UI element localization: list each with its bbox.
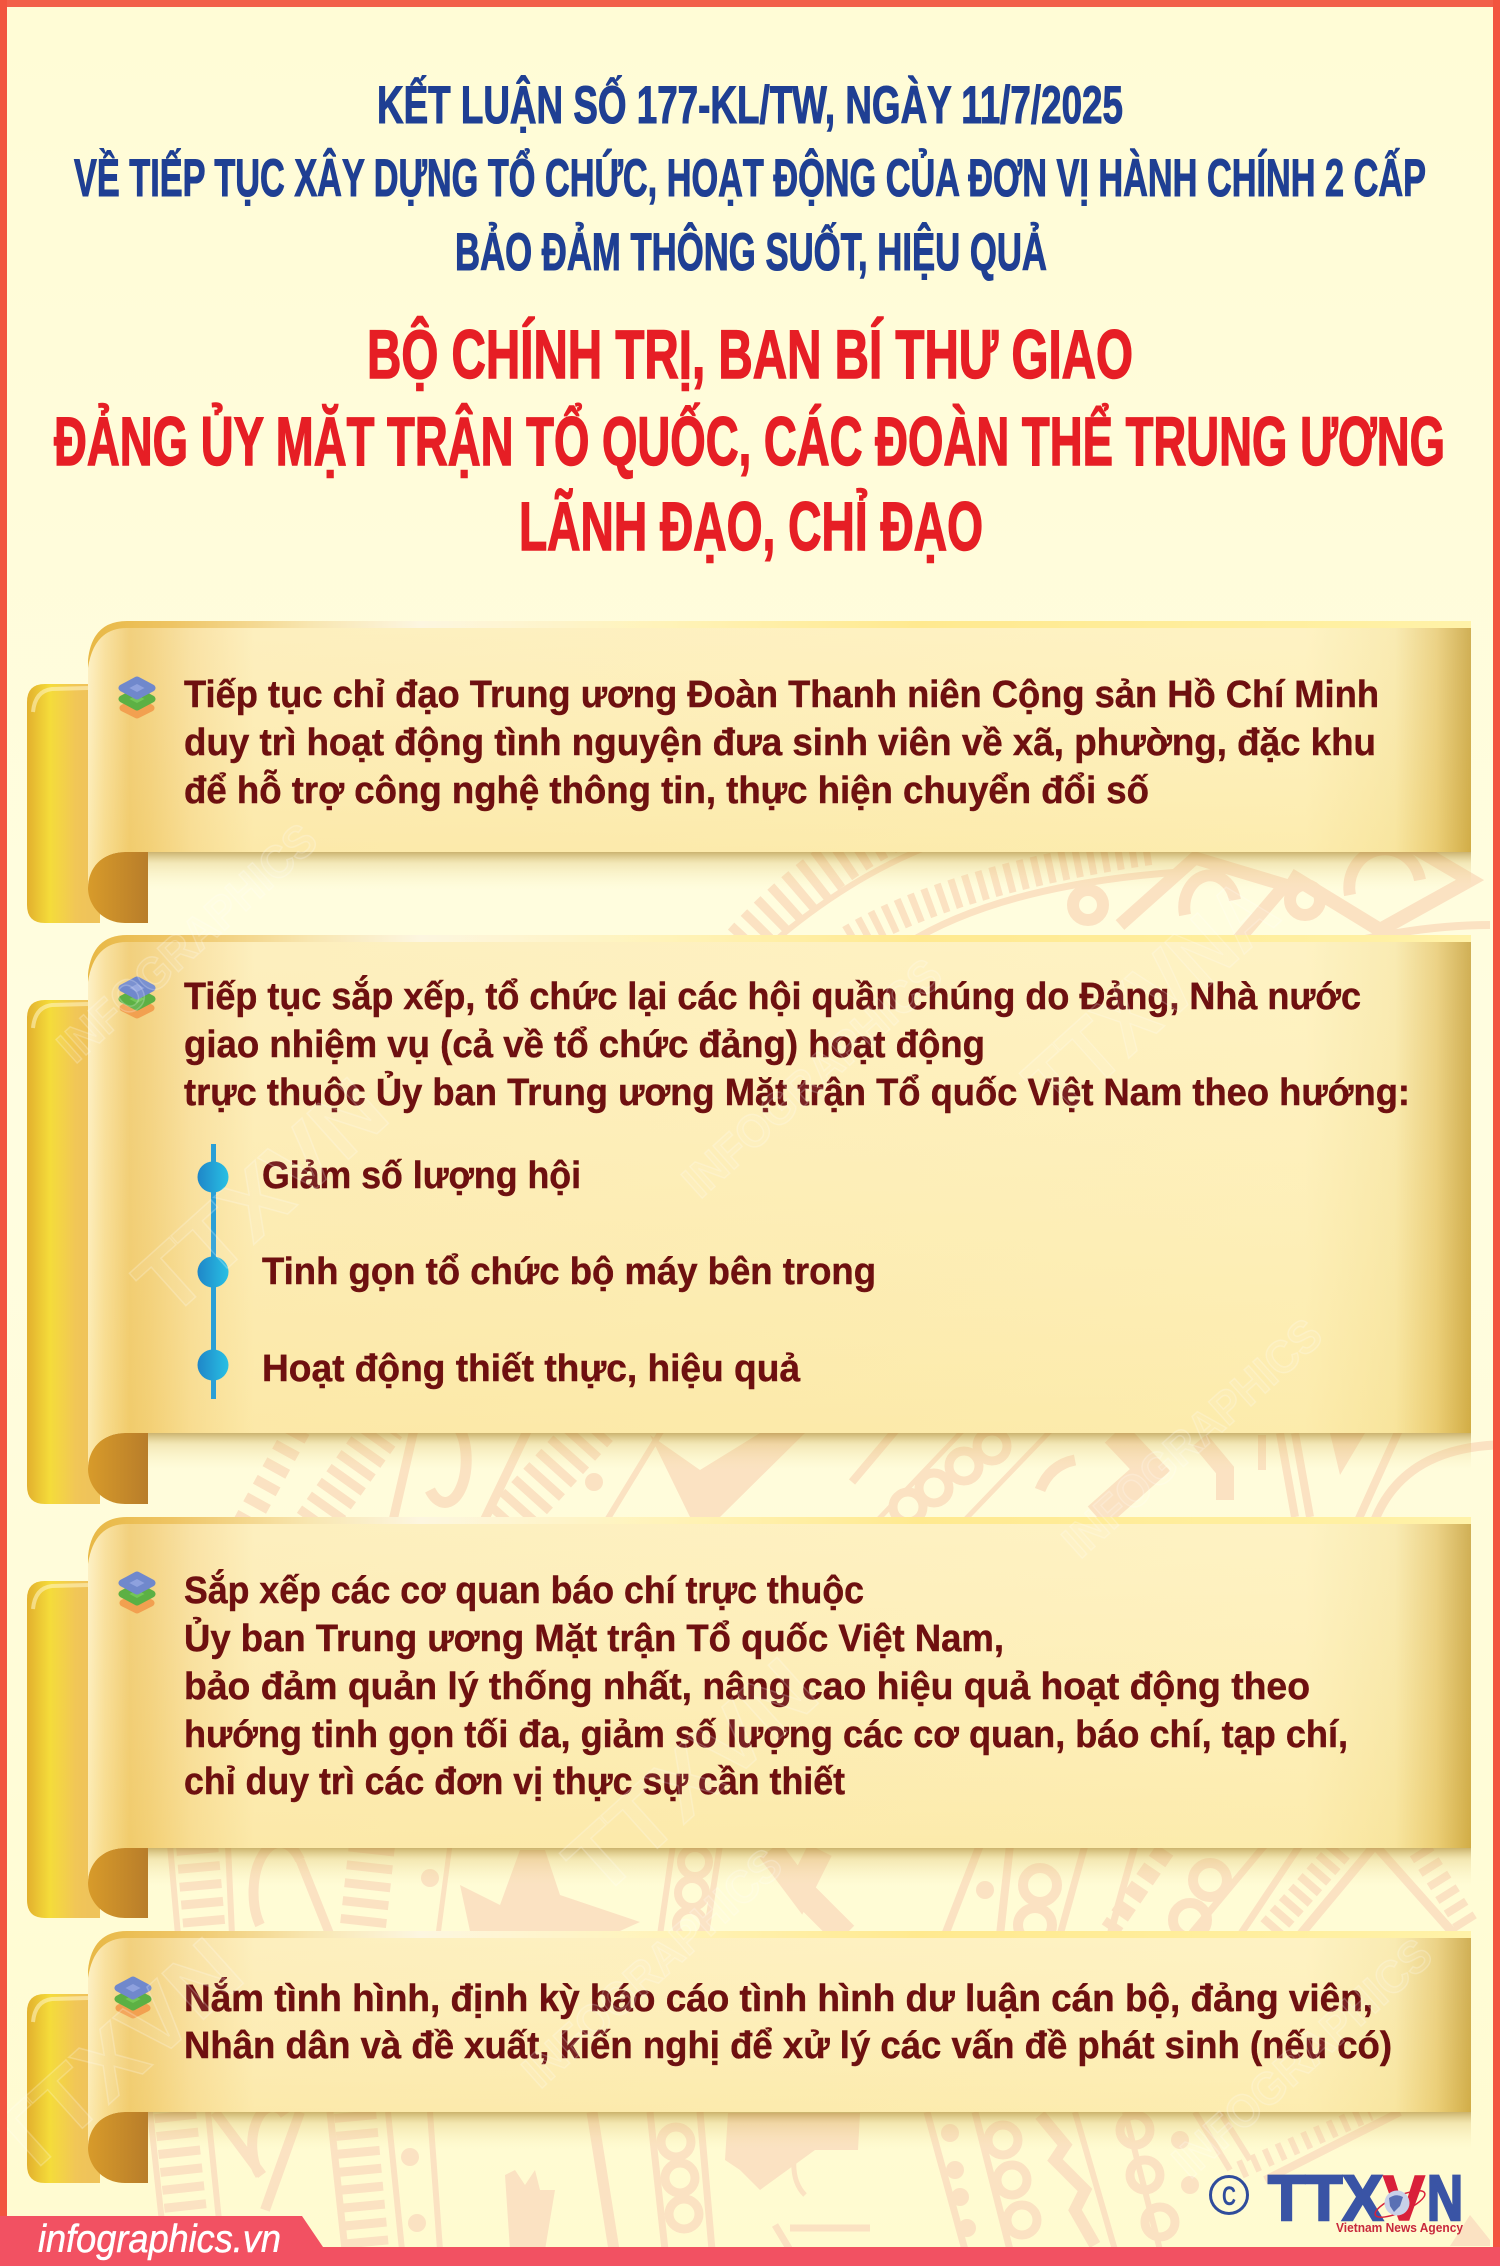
panel: scroll 2 bbox=[27, 935, 1471, 1504]
scroll front sheet bbox=[88, 1938, 1471, 2148]
heading: conclusion title: KẾT LUẬN SỐ 177-KL/TW, NGÀY 11/7/2025 bbox=[377, 74, 1123, 135]
heading: red title bbox=[54, 316, 1445, 565]
watermarks: TTXVNA bbox=[1006, 860, 1296, 1135]
text block: Tiếp tục sắp xếp, tổ chức lại các hội quần chúng do Đảng, Nhà nước bbox=[184, 974, 1361, 1018]
scroll front sheet bbox=[88, 1524, 1471, 1883]
timeline bbox=[198, 1144, 228, 1399]
heading: red title: BỘ CHÍNH TRỊ, BAN BÍ THƯ GIAO bbox=[367, 316, 1133, 393]
watermarks: TTXVN bbox=[116, 1060, 406, 1335]
watermarks bbox=[0, 813, 1442, 2195]
text block bbox=[184, 974, 1410, 1114]
scroll front sheet bbox=[88, 628, 1471, 888]
heading: red title: LÃNH ĐẠO, CHỈ ĐẠO bbox=[519, 488, 983, 565]
scroll front sheet bbox=[88, 942, 1471, 1469]
text block bbox=[184, 1976, 1392, 2067]
logo: TTXVN: N bbox=[1427, 2162, 1463, 2234]
gap 3 motifs bbox=[197, 1845, 205, 1935]
text block: để hỗ trợ công nghệ thông tin, thực hiện chuyển đổi số bbox=[184, 768, 1149, 812]
text block bbox=[184, 674, 1379, 812]
text block: Tiếp tục chỉ đạo Trung ương Đoàn Thanh niên Cộng sản Hồ Chí Minh bbox=[184, 674, 1379, 716]
icon: stacked layers bbox=[122, 1575, 152, 1610]
text block: chỉ duy trì các đơn vị thực sự cần thiết bbox=[184, 1761, 845, 1803]
bullet list: Hoạt động thiết thực, hiệu quả bbox=[262, 1348, 801, 1390]
watermarks: INFOGRAPHICS bbox=[512, 1838, 792, 2097]
bullet list bbox=[262, 1155, 876, 1390]
panel: scroll 1 bbox=[27, 621, 1471, 923]
footer band bbox=[0, 2216, 1500, 2266]
watermarks: INFOGRAPHICS bbox=[47, 813, 327, 1072]
icon: stacked layers bbox=[122, 680, 152, 715]
heading: conclusion title bbox=[74, 74, 1426, 282]
scroll top band bbox=[88, 621, 1471, 680]
text block: Nhân dân và đề xuất, kiến nghị để xử lý các vấn đề phát sinh (nếu có) bbox=[184, 2025, 1392, 2067]
gap 4 motifs bbox=[175, 2112, 190, 2250]
bronze drum background pattern bbox=[150, 800, 1495, 2250]
icon: stacked layers bbox=[122, 980, 152, 1015]
panel: scroll 3 bbox=[27, 1517, 1471, 1918]
watermarks: INFOGRAPHICS bbox=[672, 948, 952, 1207]
text block: giao nhiệm vụ (cả về tổ chức đảng) hoạt động bbox=[184, 1024, 985, 1066]
logo: TTXVN: Vietnam News Agency bbox=[1336, 2220, 1464, 2235]
logo: TTXVN: V bbox=[1383, 2162, 1425, 2234]
logo: TTXVN bbox=[1268, 2162, 1464, 2235]
scroll back strip bbox=[27, 1581, 100, 1918]
bullet list: Tinh gọn tổ chức bộ máy bên trong bbox=[262, 1251, 876, 1293]
scroll top band bbox=[88, 1931, 1471, 1990]
logo: TTXVN: TTX bbox=[1268, 2162, 1383, 2234]
scroll back strip bbox=[27, 684, 100, 923]
text block: Ủy ban Trung ương Mặt trận Tổ quốc Việt Nam, bbox=[184, 1616, 1004, 1660]
text block: duy trì hoạt động tình nguyện đưa sinh viên về xã, phường, đặc khu bbox=[184, 722, 1376, 764]
text block: Sắp xếp các cơ quan báo chí trực thuộc bbox=[184, 1568, 864, 1612]
panel: scroll 4 bbox=[27, 1931, 1471, 2183]
icon: copyright: C bbox=[1222, 2181, 1236, 2211]
heading: conclusion title: BẢO ĐẢM THÔNG SUỐT, HIỆU QUẢ bbox=[455, 221, 1047, 282]
text block: bảo đảm quản lý thống nhất, nâng cao hiệu quả hoạt động theo bbox=[184, 1666, 1310, 1708]
scroll back strip bbox=[27, 1994, 100, 2183]
text block: trực thuộc Ủy ban Trung ương Mặt trận Tổ quốc Việt Nam theo hướng: bbox=[184, 1070, 1410, 1114]
scroll top band bbox=[88, 935, 1471, 994]
text block: Nắm tình hình, định kỳ báo cáo tình hình dư luận cán bộ, đảng viên, bbox=[184, 1976, 1373, 2020]
scroll top band bbox=[88, 1517, 1471, 1576]
text block bbox=[184, 1568, 1348, 1803]
scroll back strip bbox=[27, 1000, 100, 1504]
watermarks: INFOGRAPHICS bbox=[1162, 1928, 1442, 2187]
watermarks: TTXVN bbox=[546, 1640, 836, 1915]
icon: copyright bbox=[1210, 2176, 1248, 2214]
footer site name: infographics.vn bbox=[38, 2218, 281, 2261]
icon: stacked layers bbox=[118, 1980, 148, 2015]
bullet list: Giảm số lượng hội bbox=[262, 1155, 581, 1197]
gap 2 motifs bbox=[245, 1425, 300, 1525]
text block: hướng tinh gọn tối đa, giảm số lượng các cơ quan, báo chí, tạp chí, bbox=[184, 1714, 1348, 1756]
watermarks: INFOGRAPHICS bbox=[1052, 1308, 1332, 1567]
gap 1 motifs bbox=[745, 800, 960, 945]
